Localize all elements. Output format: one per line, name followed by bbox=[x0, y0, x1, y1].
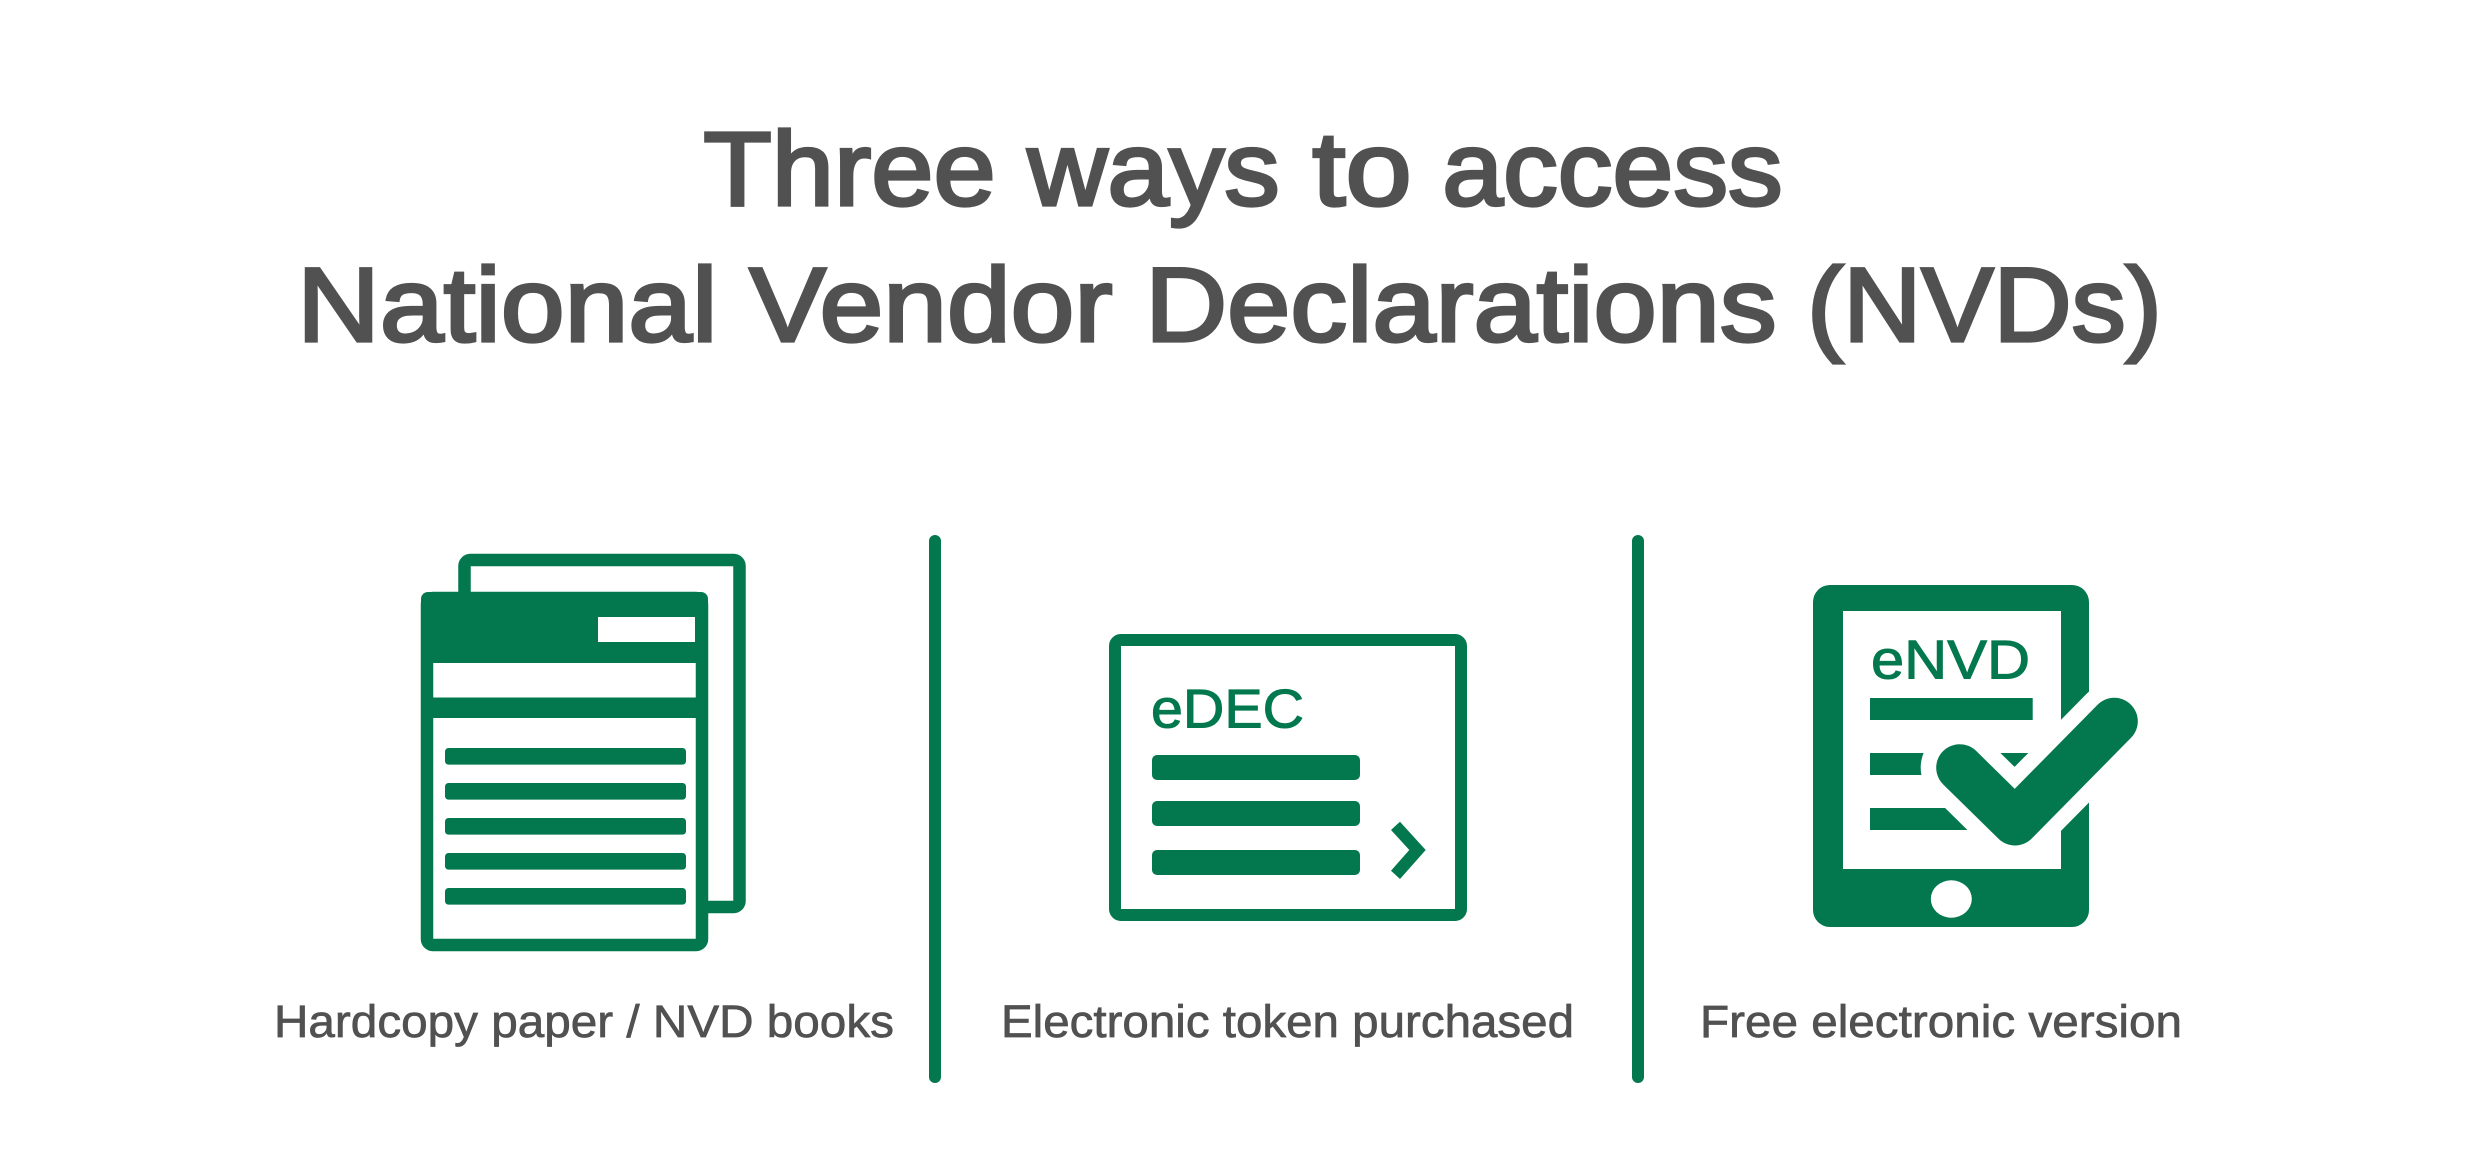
title: ways bbox=[1026, 111, 1280, 228]
title: (NVDs) bbox=[1807, 247, 2162, 364]
panel: electronic token bbox=[1001, 640, 1574, 1047]
icon: paper documents bbox=[421, 560, 740, 945]
title: Vendor bbox=[750, 247, 1112, 364]
icon: eNVD tablet with check mark: eNVD bbox=[1871, 629, 2030, 691]
label: free electronic: Free electronic version bbox=[1700, 996, 2182, 1047]
label: hardcopy: Hardcopy paper / NVD books bbox=[274, 996, 894, 1047]
title: Three bbox=[703, 111, 996, 228]
label: electronic token: Electronic token purchased bbox=[1001, 996, 1574, 1047]
title: National bbox=[297, 247, 718, 364]
title: Declarations bbox=[1145, 247, 1777, 364]
icon: eDEC card bbox=[1115, 640, 1461, 915]
icon: eNVD tablet with check mark bbox=[1813, 585, 2114, 927]
panel: hardcopy paper bbox=[274, 560, 894, 1047]
panel: free electronic version bbox=[1700, 585, 2182, 1047]
icon: eDEC card: eDEC bbox=[1151, 678, 1304, 740]
title: access bbox=[1442, 111, 1783, 228]
title bbox=[297, 111, 2162, 364]
divider: right bbox=[1632, 535, 1644, 1083]
divider: left bbox=[929, 535, 941, 1083]
title: to bbox=[1312, 111, 1412, 228]
